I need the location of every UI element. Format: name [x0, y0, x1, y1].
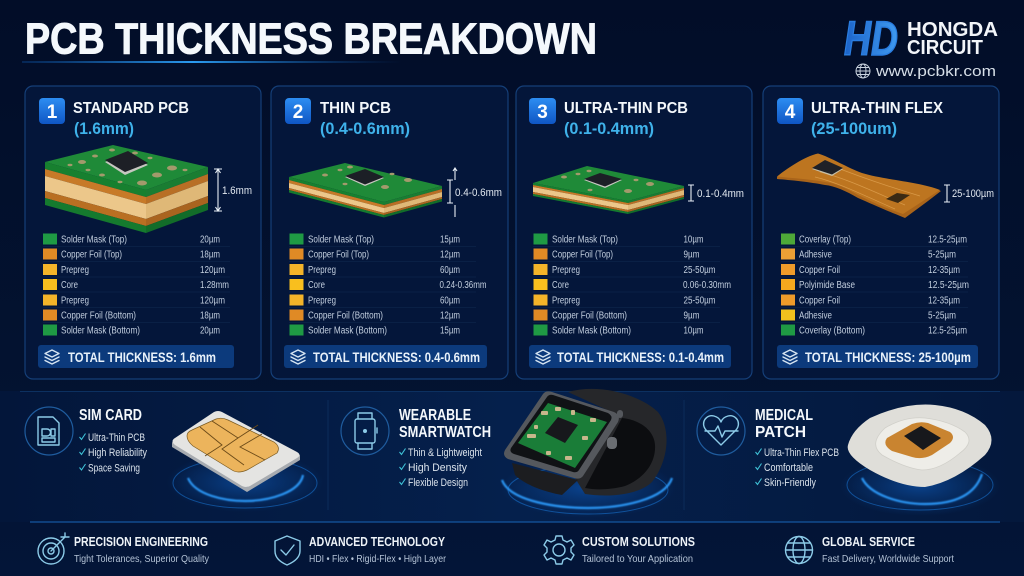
benefits: SIM card: Space Saving [88, 462, 140, 474]
layer table: thin PCB: Core [308, 280, 325, 291]
layer table: flex: Coverlay (Bottom) [799, 326, 865, 336]
text: precision engineering: PRECISION ENGINEERING [74, 534, 208, 549]
total thickness: 0.4-0.6mm: TOTAL THICKNESS: 0.4-0.6mm [313, 349, 480, 365]
PCB illustration: thin stack [289, 163, 442, 218]
layer table: standard PCB: 18µm [200, 250, 220, 260]
heading: standard PCB: STANDARD PCB [73, 100, 189, 117]
layer table: standard PCB: 20µm [200, 234, 220, 246]
dimension: 25-100µm [944, 185, 994, 202]
layer table: standard PCB [43, 234, 230, 336]
benefits: SIM card: Ultra-Thin PCB [88, 432, 145, 444]
heading: thin PCB: (0.4-0.6mm) [320, 119, 410, 138]
layer table: flex: 5-25µm [928, 250, 956, 260]
text: advanced technology [309, 534, 446, 565]
total thickness: 1.6mm: TOTAL THICKNESS: 1.6mm [68, 349, 216, 365]
text: custom solutions [582, 534, 695, 565]
layer table: standard PCB: Solder Mask (Bottom) [61, 326, 140, 336]
layer table: ultra-thin PCB: 10µm [684, 234, 704, 246]
dimension: 0.1-0.4mm: 0.1-0.4mm [697, 188, 744, 200]
layer table: ultra-thin PCB: Prepreg [552, 265, 580, 276]
layer table: standard PCB: 120µm [200, 265, 225, 276]
icon: target [38, 533, 69, 564]
logo: Hongda Circuit: HONGDA [907, 19, 998, 41]
layer table: ultra-thin PCB: 25-50µm [684, 265, 716, 276]
layer table: thin PCB: Copper Foil (Top) [308, 250, 369, 260]
benefits: smartwatch: High Density [408, 462, 467, 474]
panel: standard PCB [25, 86, 261, 379]
layer table: ultra-thin PCB: 0.06-0.30mm [683, 280, 731, 291]
footer item: precision engineering [38, 533, 210, 565]
layer table: standard PCB: Prepreg [61, 265, 89, 276]
layer table: standard PCB: 1.28mm [200, 280, 229, 291]
layer table: thin PCB: Prepreg [308, 296, 336, 306]
heading: medical patch: MEDICAL [755, 407, 813, 424]
heading: ultra-thin flex: ULTRA-THIN FLEX [811, 100, 943, 117]
heading: ultra-thin flex: (25-100um) [811, 119, 897, 138]
layer table: ultra-thin PCB: 25-50µm [684, 296, 716, 306]
application: medical patch [697, 405, 1000, 516]
heading: standard PCB [73, 100, 189, 138]
layer table: flex: 12.5-25µm [928, 326, 967, 336]
total thickness: 25-100µm [777, 345, 978, 368]
total thickness: 0.1-0.4mm: TOTAL THICKNESS: 0.1-0.4mm [557, 349, 724, 365]
panel: ultra-thin flex [763, 86, 999, 379]
text: global service [822, 534, 954, 565]
text: custom solutions: CUSTOM SOLUTIONS [582, 534, 695, 549]
SIM card illustration [167, 411, 323, 512]
badge 3: 3 [537, 102, 548, 123]
benefits: medical patch: Skin-Friendly [764, 477, 816, 489]
text: advanced technology: HDI • Flex • Rigid-Flex • High Layer [309, 553, 446, 565]
layer table: thin PCB: 15µm [440, 326, 460, 336]
heading: medical patch: PATCH [755, 424, 806, 441]
text: precision engineering: Tight Tolerances, Superior Quality [74, 553, 210, 565]
PCB illustration: standard stack [45, 145, 208, 233]
layer table: standard PCB: 120µm [200, 296, 225, 306]
layer table: thin PCB [289, 234, 486, 336]
icon: globe [786, 536, 812, 564]
layer table: ultra-thin PCB: Solder Mask (Top) [552, 234, 618, 246]
total thickness: 0.1-0.4mm [529, 345, 731, 368]
benefits: smartwatch: Thin & Lightweight [408, 447, 482, 459]
heading: ultra-thin PCB: ULTRA-THIN PCB [564, 100, 688, 117]
badge 4 [777, 98, 803, 124]
heading: wearable smartwatch: WEARABLE [399, 407, 471, 424]
layer table: ultra-thin PCB: 10µm [684, 326, 704, 336]
application: SIM card [25, 407, 323, 512]
panel: ultra-thin PCB [516, 86, 752, 379]
layer table: thin PCB: 60µm [440, 265, 460, 276]
logo: Hongda Circuit [844, 13, 998, 80]
total thickness: 25-100µm: TOTAL THICKNESS: 25-100µm [805, 349, 971, 365]
heading: wearable smartwatch [399, 407, 491, 441]
footer item: global service [786, 534, 954, 565]
heading: ultra-thin PCB: (0.1-0.4mm) [564, 119, 654, 138]
benefits: medical patch [756, 447, 839, 489]
layer table: standard PCB: Solder Mask (Top) [61, 234, 127, 246]
layer table: ultra-thin PCB: Solder Mask (Bottom) [552, 326, 631, 336]
application: smartwatch [341, 389, 676, 518]
layer table: flex: 12.5-25µm [928, 234, 967, 246]
badge 1: 1 [47, 102, 58, 123]
heading: SIM card: SIM CARD [79, 407, 142, 424]
badge 4: 4 [785, 102, 796, 123]
layer table: standard PCB: 20µm [200, 326, 220, 336]
benefits: medical patch: Comfortable [764, 462, 813, 474]
layer table: standard PCB: Copper Foil (Top) [61, 250, 122, 260]
layer table: ultra-thin PCB: Copper Foil (Top) [552, 250, 613, 260]
layer table: flex: Coverlay (Top) [799, 234, 851, 246]
icon: shield [275, 536, 300, 565]
benefits: SIM card: High Reliability [88, 447, 147, 459]
benefits: smartwatch [400, 447, 482, 489]
icon: SIM card [25, 407, 73, 455]
layer table: thin PCB: 15µm [440, 234, 460, 246]
smartwatch illustration [500, 389, 676, 518]
dimension: 0.4-0.6mm [447, 168, 502, 217]
text: precision engineering [74, 534, 210, 565]
text: custom solutions: Tailored to Your Application [582, 553, 693, 565]
dimension: 0.1-0.4mm [688, 185, 744, 201]
text: global service: Fast Delivery, Worldwide Support [822, 553, 954, 565]
layer table: ultra-thin PCB: Core [552, 280, 569, 291]
badge 2 [285, 98, 311, 124]
heading: ultra-thin PCB [564, 100, 688, 138]
layer table: flex: Copper Foil [799, 296, 840, 306]
applications band [0, 391, 1024, 522]
badge 1 [39, 98, 65, 124]
dimension: 1.6mm [214, 169, 252, 211]
heading: thin PCB: THIN PCB [320, 100, 391, 117]
icon: gear [544, 536, 574, 564]
layer table: thin PCB: 12µm [440, 250, 460, 260]
layer table: flex: Adhesive [799, 250, 832, 260]
heading: standard PCB: (1.6mm) [74, 119, 134, 138]
logo: Hongda Circuit: www.pcbkr.com [875, 63, 996, 80]
logo: Hongda Circuit: CIRCUIT [907, 37, 983, 59]
heading: wearable smartwatch: SMARTWATCH [399, 424, 491, 441]
layer table: flex: 5-25µm [928, 310, 956, 322]
medical patch illustration [840, 405, 1000, 516]
title: PCB THICKNESS BREAKDOWN [25, 14, 597, 64]
layer table: ultra-thin PCB: 9µm [684, 310, 700, 322]
total thickness: 0.4-0.6mm [284, 345, 487, 368]
heading: thin PCB [320, 100, 410, 138]
layer table: thin PCB: 0.24-0.36mm [440, 280, 486, 291]
dimension: 1.6mm: 1.6mm [222, 185, 252, 197]
layer table: thin PCB: 60µm [440, 296, 460, 306]
text: global service: GLOBAL SERVICE [822, 534, 915, 549]
layer table: ultra-thin PCB [533, 234, 731, 336]
total thickness: 1.6mm [38, 345, 234, 368]
layer table: flex: Adhesive [799, 310, 832, 322]
layer table: flex: 12.5-25µm [928, 280, 969, 291]
badge 2: 2 [293, 102, 303, 123]
footer item: custom solutions [544, 534, 695, 565]
heading: medical patch [755, 407, 813, 441]
benefits: SIM card [80, 432, 147, 474]
layer table: ultra-thin PCB: 9µm [684, 250, 700, 260]
dimension: 25-100µm: 25-100µm [952, 188, 994, 200]
flex PCB illustration [777, 154, 941, 218]
panel: thin PCB [271, 86, 508, 379]
dimension: 0.4-0.6mm: 0.4-0.6mm [455, 187, 502, 199]
layer table: flex: Polyimide Base [799, 280, 855, 291]
icon: heart pulse [697, 407, 745, 455]
layer table: thin PCB: 12µm [440, 310, 460, 322]
layer table: standard PCB: Copper Foil (Bottom) [61, 310, 136, 322]
benefits: smartwatch: Flexible Design [408, 477, 468, 489]
layer table: ultra-thin PCB: Prepreg [552, 296, 580, 306]
layer table: thin PCB: Solder Mask (Top) [308, 234, 374, 246]
benefits: medical patch: Ultra-Thin Flex PCB [764, 447, 839, 459]
layer table: thin PCB: Solder Mask (Bottom) [308, 326, 387, 336]
layer table: thin PCB: Copper Foil (Bottom) [308, 310, 383, 322]
layer table: flex: 12-35µm [928, 296, 960, 306]
text: advanced technology: ADVANCED TECHNOLOGY [309, 534, 445, 549]
layer table: flex [781, 234, 969, 336]
layer table: ultra-thin PCB: Copper Foil (Bottom) [552, 310, 627, 322]
layer table: standard PCB: Prepreg [61, 296, 89, 306]
layer table: thin PCB: Prepreg [308, 265, 336, 276]
layer table: flex: 12-35µm [928, 265, 960, 276]
heading: ultra-thin flex [811, 100, 943, 138]
layer table: standard PCB: Core [61, 280, 78, 291]
icon: smartwatch [341, 407, 389, 455]
layer table: flex: Copper Foil [799, 265, 840, 276]
badge 3 [529, 98, 556, 124]
footer item: advanced technology [275, 534, 446, 565]
PCB illustration: ultra-thin stack [533, 166, 684, 214]
logo: Hongda Circuit: HD [844, 13, 898, 66]
layer table: standard PCB: 18µm [200, 310, 220, 322]
